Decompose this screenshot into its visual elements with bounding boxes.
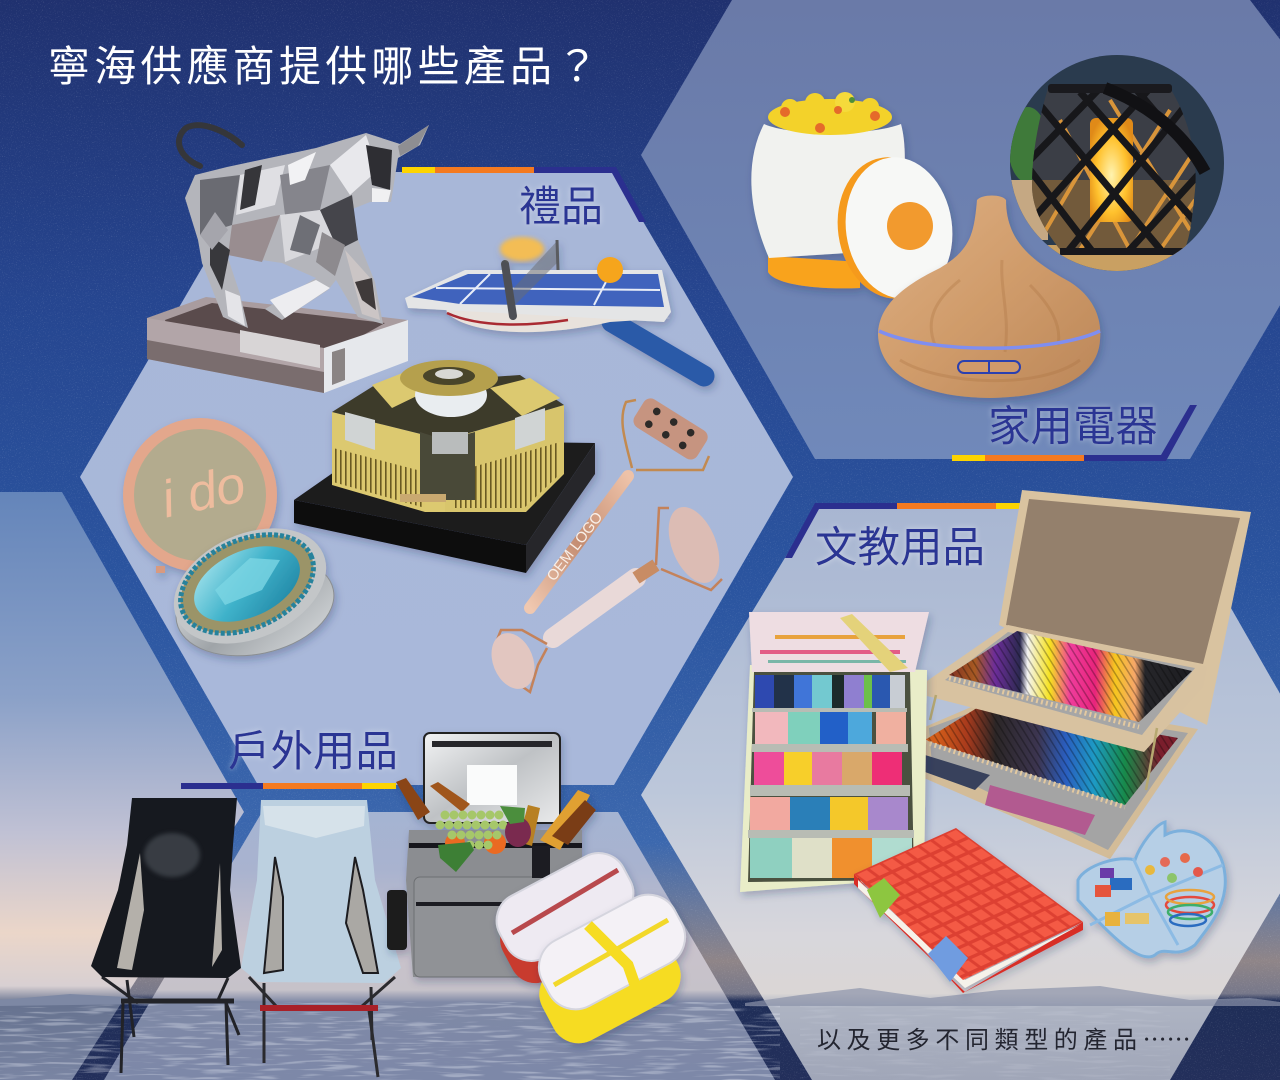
diffuser light ring bbox=[879, 331, 1100, 348]
side pouch bbox=[387, 890, 407, 950]
cooker body bbox=[751, 124, 905, 258]
heading: gifts: 禮品 bbox=[519, 183, 603, 230]
fruit and drinks bbox=[396, 778, 596, 872]
plant bbox=[1010, 107, 1041, 180]
bull crystal facets bbox=[200, 125, 429, 326]
diffuser grain bbox=[900, 260, 1080, 381]
product: red block notebook bbox=[854, 828, 1083, 993]
bat underside bbox=[446, 308, 670, 332]
green clip bbox=[867, 878, 900, 918]
product: rose gold compact mirror bbox=[123, 418, 277, 573]
binder clips bbox=[1095, 868, 1149, 926]
roof dome bbox=[415, 373, 487, 417]
paper clips bbox=[1166, 890, 1214, 926]
black base bbox=[294, 440, 595, 545]
footer note: 以及更多不同類型的產品…… bbox=[817, 1020, 1191, 1055]
cooler pocket bbox=[414, 877, 574, 977]
tray compartments bbox=[1090, 858, 1223, 945]
heading: stationery: 文教用品 bbox=[815, 525, 985, 572]
bat table top bbox=[405, 270, 671, 322]
black chair seat bbox=[91, 798, 241, 978]
lower coloured pencils bbox=[925, 703, 1178, 805]
cooler body bbox=[406, 830, 582, 977]
product: wood aroma diffuser bbox=[878, 196, 1100, 398]
red crossbar bbox=[260, 1005, 378, 1011]
gold walls bbox=[332, 412, 445, 512]
title: 寧海供應商提供哪些產品？ bbox=[48, 43, 602, 90]
pens compartment bbox=[925, 755, 990, 790]
bat handle bbox=[612, 322, 704, 376]
bull body bbox=[185, 125, 429, 328]
shelves bbox=[748, 708, 914, 838]
accent bar: gifts bbox=[402, 167, 646, 222]
product: apple stationery tray bbox=[1078, 822, 1225, 957]
lower tray bbox=[920, 695, 1198, 859]
tray outline bbox=[1078, 822, 1225, 957]
bat net bbox=[510, 240, 558, 306]
grapes bbox=[440, 815, 510, 845]
mirror engraving: i do bbox=[156, 455, 250, 529]
decorative accent bars bbox=[181, 167, 1197, 789]
panel: gifts hexagon bbox=[80, 172, 793, 785]
tape row 2 bbox=[755, 712, 906, 744]
black lattice bbox=[1032, 93, 1196, 248]
cooler lid interior bbox=[424, 733, 560, 823]
notebook cover bbox=[854, 828, 1083, 980]
product: washi tape display box bbox=[740, 612, 929, 892]
cooker lid bbox=[829, 150, 955, 306]
product: crystal bull bbox=[147, 125, 429, 393]
roller frame bbox=[622, 400, 709, 470]
water reflections bbox=[0, 986, 1280, 1080]
quartz handle bbox=[553, 578, 636, 638]
black chair highlight bbox=[144, 833, 200, 877]
lantern flame bbox=[1090, 118, 1133, 222]
accent bar: home appliances bbox=[952, 405, 1197, 461]
tape row 3 bbox=[754, 752, 902, 785]
bull glass base bbox=[147, 297, 408, 393]
pushpins bbox=[1145, 853, 1203, 883]
silver chair mesh bbox=[264, 857, 283, 973]
tray stays bbox=[930, 695, 1157, 790]
lantern cage bbox=[1030, 85, 1200, 255]
yellow chopsticks bbox=[554, 920, 668, 985]
panel: lower-left sky hexagon bbox=[0, 492, 244, 1080]
product: flame lantern photo bbox=[1005, 50, 1230, 275]
product: table tennis bat bbox=[405, 237, 704, 376]
product: yellow bento box bbox=[528, 884, 696, 1053]
tape row 1 bbox=[755, 675, 905, 708]
cooker base bbox=[768, 256, 860, 288]
quartz small head bbox=[484, 627, 542, 695]
case lid bbox=[999, 490, 1251, 725]
logo on handle: OEM LOGO bbox=[544, 509, 606, 584]
scrambled egg bbox=[768, 92, 892, 135]
diffuser body bbox=[878, 196, 1100, 398]
lid yolk bbox=[887, 202, 933, 250]
upper coloured pencils bbox=[949, 631, 1192, 722]
product: insulated cooler bag bbox=[387, 733, 596, 977]
panel: stationery hexagon bbox=[641, 505, 1280, 1080]
product: red bento box bbox=[487, 843, 644, 992]
panel: outdoor hexagon bbox=[104, 812, 775, 1080]
diffuser buttons bbox=[958, 361, 1020, 373]
black chair mesh bbox=[117, 853, 144, 970]
upper tray bbox=[927, 625, 1207, 752]
silver chair legs bbox=[249, 977, 395, 1077]
building centre and roof bbox=[332, 375, 564, 440]
product: rose quartz roller bbox=[484, 500, 729, 695]
blue clip bbox=[928, 936, 968, 982]
product: metal face roller bbox=[530, 395, 711, 608]
tape box lid bbox=[749, 612, 929, 672]
orange balls bbox=[500, 237, 544, 261]
tape box body bbox=[740, 665, 927, 892]
product: egg cooker bbox=[751, 92, 961, 306]
tape row 4 bbox=[750, 797, 908, 830]
lantern handle bbox=[1105, 88, 1205, 172]
accent bar: stationery bbox=[785, 503, 1020, 558]
product: jewelled silver compact bbox=[156, 506, 344, 670]
cooler strap bbox=[532, 846, 550, 878]
yellow band bbox=[588, 925, 642, 1005]
red chopsticks bbox=[512, 870, 618, 933]
quartz large head bbox=[659, 500, 729, 590]
product: black camping chair bbox=[91, 798, 241, 1073]
roller handle bbox=[530, 476, 628, 608]
product: wooden art case bbox=[920, 490, 1251, 859]
bull tail bbox=[179, 125, 242, 166]
silver chair seat bbox=[241, 800, 401, 983]
heading: home appliances: 家用電器 bbox=[988, 404, 1158, 451]
panel: home appliances hexagon bbox=[641, 0, 1280, 459]
inner amber slats bbox=[1040, 100, 1195, 250]
tape row 5 bbox=[750, 838, 912, 878]
quartz frame bbox=[497, 508, 722, 692]
black chair legs bbox=[102, 977, 239, 1073]
roller head bbox=[630, 395, 711, 463]
accent bar: outdoor bbox=[181, 783, 396, 789]
product: silver camping chair bbox=[241, 800, 401, 1077]
product: gold building model bbox=[294, 360, 595, 573]
notebook edge bbox=[854, 874, 1083, 993]
lantern rim bbox=[1048, 84, 1172, 93]
heading: outdoor: 戶外用品 bbox=[228, 729, 398, 776]
